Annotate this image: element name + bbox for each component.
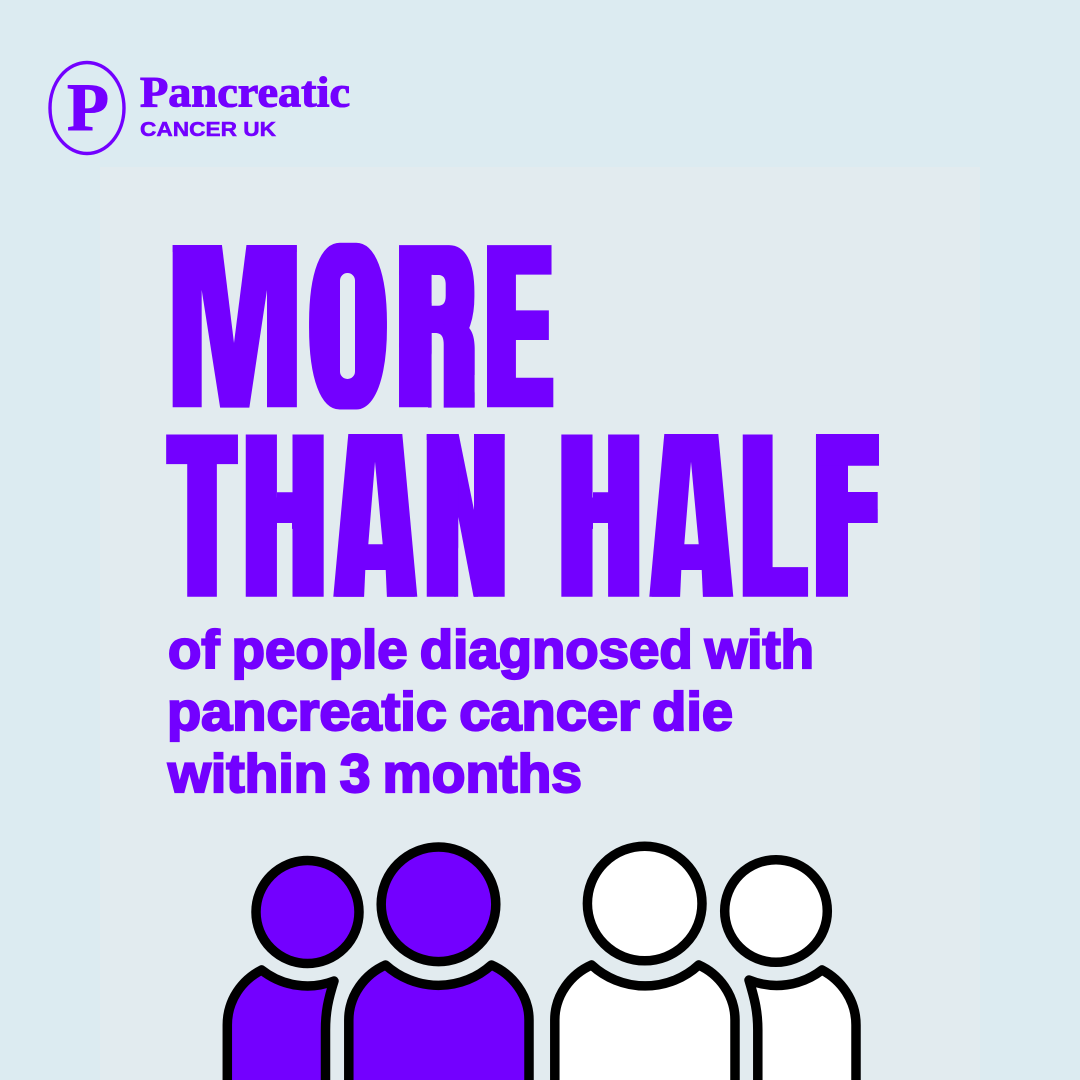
logo emblem: oval with P: P [67,69,109,145]
headline line 1: MORE: M [170,198,299,455]
headline line 1: MORE: E [489,197,549,454]
person 2: purple [349,847,529,1080]
headline line 2: THAN: T [173,388,231,644]
headline line 2: THAN [173,386,504,644]
subheading line 2: pancreatic cancer die [167,682,733,742]
subheading [167,620,814,804]
headline line 2: THAN: A [341,388,409,644]
headline line 2: HALF [562,386,874,645]
headline line 1: MORE: R [400,197,472,455]
headline line 2: HALF: H [562,386,638,644]
inner panel [100,167,980,1080]
headline line 2: THAN: H [247,386,323,644]
subheading line 1: of people diagnosed with [168,620,814,680]
headline line 2: HALF: L [744,387,803,644]
headline line 2: HALF: A [657,388,725,644]
person 3: white [555,846,735,1080]
logo wordmark: CANCER UK: CANCER UK [140,119,277,141]
logo wordmark: Pancreatic: Pancreatic [140,70,350,116]
icon: group of four people, two purple and two white [227,846,856,1080]
person 1: purple [227,860,359,1080]
headline line 2: THAN: N [428,386,504,644]
logo emblem: oval with P [50,62,124,154]
headline line 1: MORE: O [313,197,383,454]
logo: Pancreatic Cancer UK [50,62,350,154]
headline line 2: HALF: F [818,387,874,645]
person 4: white [725,860,856,1080]
headline: MORE THAN HALF [170,197,874,645]
subheading line 3: within 3 months [167,744,582,804]
headline line 1: MORE [170,197,549,455]
